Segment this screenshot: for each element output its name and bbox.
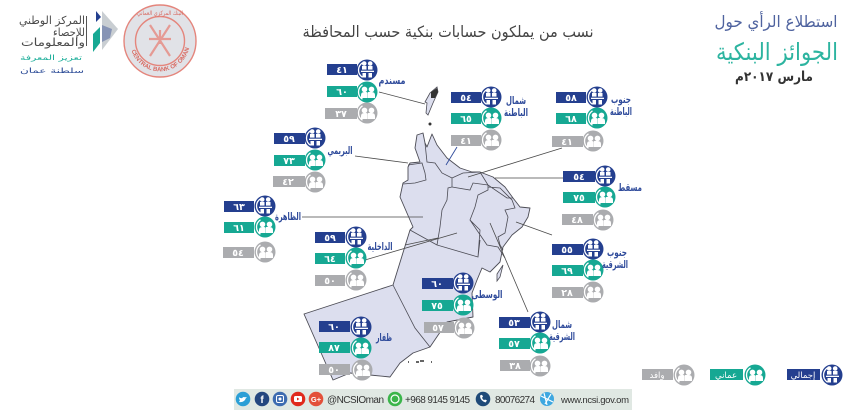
icon: facebook (255, 392, 269, 406)
omani value: ٨٧ (328, 343, 340, 354)
expat bar (325, 108, 357, 119)
omani bar (552, 265, 583, 276)
omani value: ٥٧ (508, 339, 520, 350)
Musandam (425, 87, 438, 115)
omani value: ٦٩ (561, 266, 573, 277)
panel: Ad Dhahirah (223, 196, 301, 262)
islet (428, 122, 432, 126)
survey line: استطلاع الرأي حول (714, 11, 838, 32)
header: survey title (714, 11, 838, 85)
expat bar (223, 247, 254, 258)
icon expat (304, 172, 326, 192)
whatsapp number: +968 9145 9145 (405, 395, 470, 406)
icon: globe (540, 392, 554, 406)
total bar (563, 171, 595, 182)
legend: expat (642, 364, 694, 386)
icon total (586, 86, 608, 108)
omani bar (451, 113, 481, 124)
bank arabic name: البنك المركزي العماني (137, 10, 183, 17)
legend (642, 364, 842, 386)
title: نسب من يملكون حسابات بنكية حسب المحافظة (302, 23, 594, 41)
total value: ٦٠ (328, 322, 340, 333)
total value: ٦٣ (233, 202, 245, 213)
total bar (327, 64, 357, 75)
legend: total: إجمالي (791, 371, 815, 381)
icon total (452, 272, 474, 294)
total bar (422, 278, 453, 289)
total bar (499, 317, 530, 328)
total bar (556, 92, 586, 103)
omani value: ٦٥ (460, 114, 472, 125)
icon expat (582, 130, 604, 152)
legend: expat: وافد (650, 371, 664, 381)
total value: ٥٩ (324, 233, 336, 244)
omani value: ٦٠ (336, 87, 348, 98)
icon: whatsapp (388, 392, 402, 406)
expat value: ٤١ (460, 136, 472, 147)
NCSI tagline: تعزيز المعرفة (20, 54, 82, 62)
icon expat (346, 270, 366, 290)
NCSI country: سلطنة عمان (20, 67, 84, 75)
omani value: ٧٣ (283, 156, 295, 167)
icon omani (530, 332, 550, 354)
icon expat (454, 318, 474, 338)
expat bar (552, 287, 583, 298)
expat value: ٥٠ (328, 365, 340, 376)
panel: Dhofar (319, 316, 392, 380)
icon total (594, 166, 616, 186)
expat value: ٣٧ (335, 109, 347, 120)
icon expat (480, 130, 502, 150)
expat bar (315, 275, 345, 286)
governorate name: الداخلية (368, 241, 392, 253)
icon omani (304, 150, 326, 170)
NCSI name text: المركز الوطني (19, 14, 85, 27)
omani bar (563, 192, 595, 203)
total value: ٥٤ (460, 93, 472, 104)
icon total (254, 196, 276, 216)
icon expat (592, 210, 614, 230)
governorate name: جنوب (611, 94, 631, 106)
survey date: مارس ٢٠١٧م (735, 69, 813, 85)
total bar (315, 232, 345, 243)
NCSI name text: للإحصاء (53, 26, 85, 39)
omani bar (224, 222, 254, 233)
expat value: ٤٢ (282, 177, 294, 188)
total value: ٦٠ (431, 279, 443, 290)
omani value: ٦٨ (565, 114, 577, 125)
omani bar (556, 113, 586, 124)
panel: North Sharqiyah (499, 312, 575, 376)
NCSI divider (86, 16, 87, 46)
legend: omani: عماني (715, 371, 737, 381)
governorate name: الوسطى (472, 289, 502, 301)
total value: ٥٨ (565, 93, 577, 104)
icon: facebook: f (260, 395, 264, 406)
icon expat (530, 356, 550, 376)
governorate name 2: الشرقية (602, 259, 628, 271)
survey topic: الجوائز البنكية (716, 38, 838, 66)
icon total (350, 316, 372, 338)
icon total (304, 128, 326, 148)
phone number: 80076274 (495, 395, 535, 406)
total bar (319, 321, 350, 332)
expat bar (273, 176, 305, 187)
governorate name: شمال (552, 319, 572, 331)
governorate name: البريمي (328, 145, 352, 157)
map of Oman (304, 87, 530, 380)
total value: ٥٣ (508, 318, 520, 329)
panel: South Sharqiyah (552, 238, 628, 302)
website: www.ncsi.gov.om (560, 395, 629, 406)
icon omani (586, 108, 608, 128)
icon: google plus (309, 392, 323, 406)
Khuriya Muriya islands (408, 361, 432, 362)
expat bar (424, 322, 454, 333)
governorate name: جنوب (607, 247, 627, 259)
expat value: ٥٧ (432, 323, 444, 334)
leader lines (302, 92, 563, 312)
omani bar (327, 86, 357, 97)
expat bar (562, 214, 593, 225)
expat bar (500, 360, 530, 371)
total bar (552, 244, 583, 255)
Masirah island (497, 265, 503, 281)
expat bar (319, 364, 350, 375)
icon omani (582, 260, 604, 280)
bank name: CENTRAL BANK OF OMAN (132, 47, 190, 72)
icon omani (452, 294, 474, 316)
expat value: ٤١ (561, 137, 573, 148)
total value: ٥٩ (283, 134, 295, 145)
icon: twitter (236, 392, 250, 406)
icon expat (254, 242, 276, 262)
governorate name: الظاهرة (275, 211, 301, 223)
omani bar (274, 155, 305, 166)
panel: Muscat (562, 166, 642, 230)
Musandam tip (431, 88, 438, 98)
NCSI mark (93, 11, 118, 52)
omani value: ٧٥ (573, 193, 585, 204)
governorate name: ظفار (375, 332, 392, 344)
NCSI name text: والمعلومات (21, 36, 85, 49)
icon expat (356, 102, 378, 124)
icon expat (352, 360, 372, 380)
icon expat (582, 282, 604, 302)
expat value: ٥٤ (232, 248, 244, 259)
footer contact bar (234, 389, 632, 410)
icon: youtube (291, 392, 305, 406)
icon omani (254, 216, 276, 238)
district borders (393, 143, 515, 347)
omani value: ٦٤ (324, 254, 336, 265)
omani bar (315, 253, 345, 264)
panel: Ad Dakhiliyah (315, 226, 392, 290)
panel: Al Buraimi (273, 128, 352, 192)
icon omani (594, 186, 616, 208)
expat value: ٣٨ (509, 361, 521, 372)
total value: ٥٤ (573, 172, 585, 183)
expat value: ٥٠ (324, 276, 336, 287)
icon: google plus: G+ (311, 395, 322, 404)
icon omani (356, 82, 378, 102)
logo: NCSI (19, 11, 118, 75)
expat bar (552, 136, 583, 147)
legend: omani (710, 364, 766, 386)
icon total (582, 238, 604, 260)
omani bar (499, 338, 530, 349)
icon omani (480, 108, 502, 128)
omani bar (422, 300, 453, 311)
governorate name: مسندم (378, 75, 406, 87)
total value: ٥٥ (561, 245, 573, 256)
icon omani (350, 338, 372, 358)
expat bar (451, 135, 481, 146)
icon total (356, 60, 378, 80)
icon: instagram (273, 392, 287, 406)
icon total (480, 86, 502, 108)
omani value: ٧٥ (431, 301, 443, 312)
expat value: ٢٨ (561, 288, 573, 299)
social handle: @NCSIOman (327, 395, 384, 406)
logo: Central Bank of Oman (123, 4, 197, 78)
icon total (530, 312, 550, 332)
panel: South Batinah (552, 86, 632, 152)
total bar (274, 133, 305, 144)
icon omani (346, 248, 366, 268)
governorate name: شمال (506, 95, 526, 107)
total bar (224, 201, 254, 212)
expat value: ٤٨ (571, 215, 583, 226)
panel: Musandam (325, 60, 406, 124)
panel: Al Wusta (422, 272, 502, 338)
governorate name 2: الباطنة (504, 107, 528, 119)
omani bar (319, 342, 350, 353)
total bar (451, 92, 481, 103)
total value: ٤١ (336, 65, 348, 76)
omani value: ٦١ (233, 223, 245, 234)
governorate name 2: الشرقية (549, 331, 575, 343)
governorate name: مسقط (618, 182, 642, 194)
icon total (346, 226, 366, 248)
icon: phone (476, 392, 490, 406)
legend: total (787, 364, 842, 386)
governorate name 2: الباطنة (610, 106, 632, 118)
NCSI name text (19, 14, 85, 49)
panel: North Batinah (451, 86, 528, 150)
